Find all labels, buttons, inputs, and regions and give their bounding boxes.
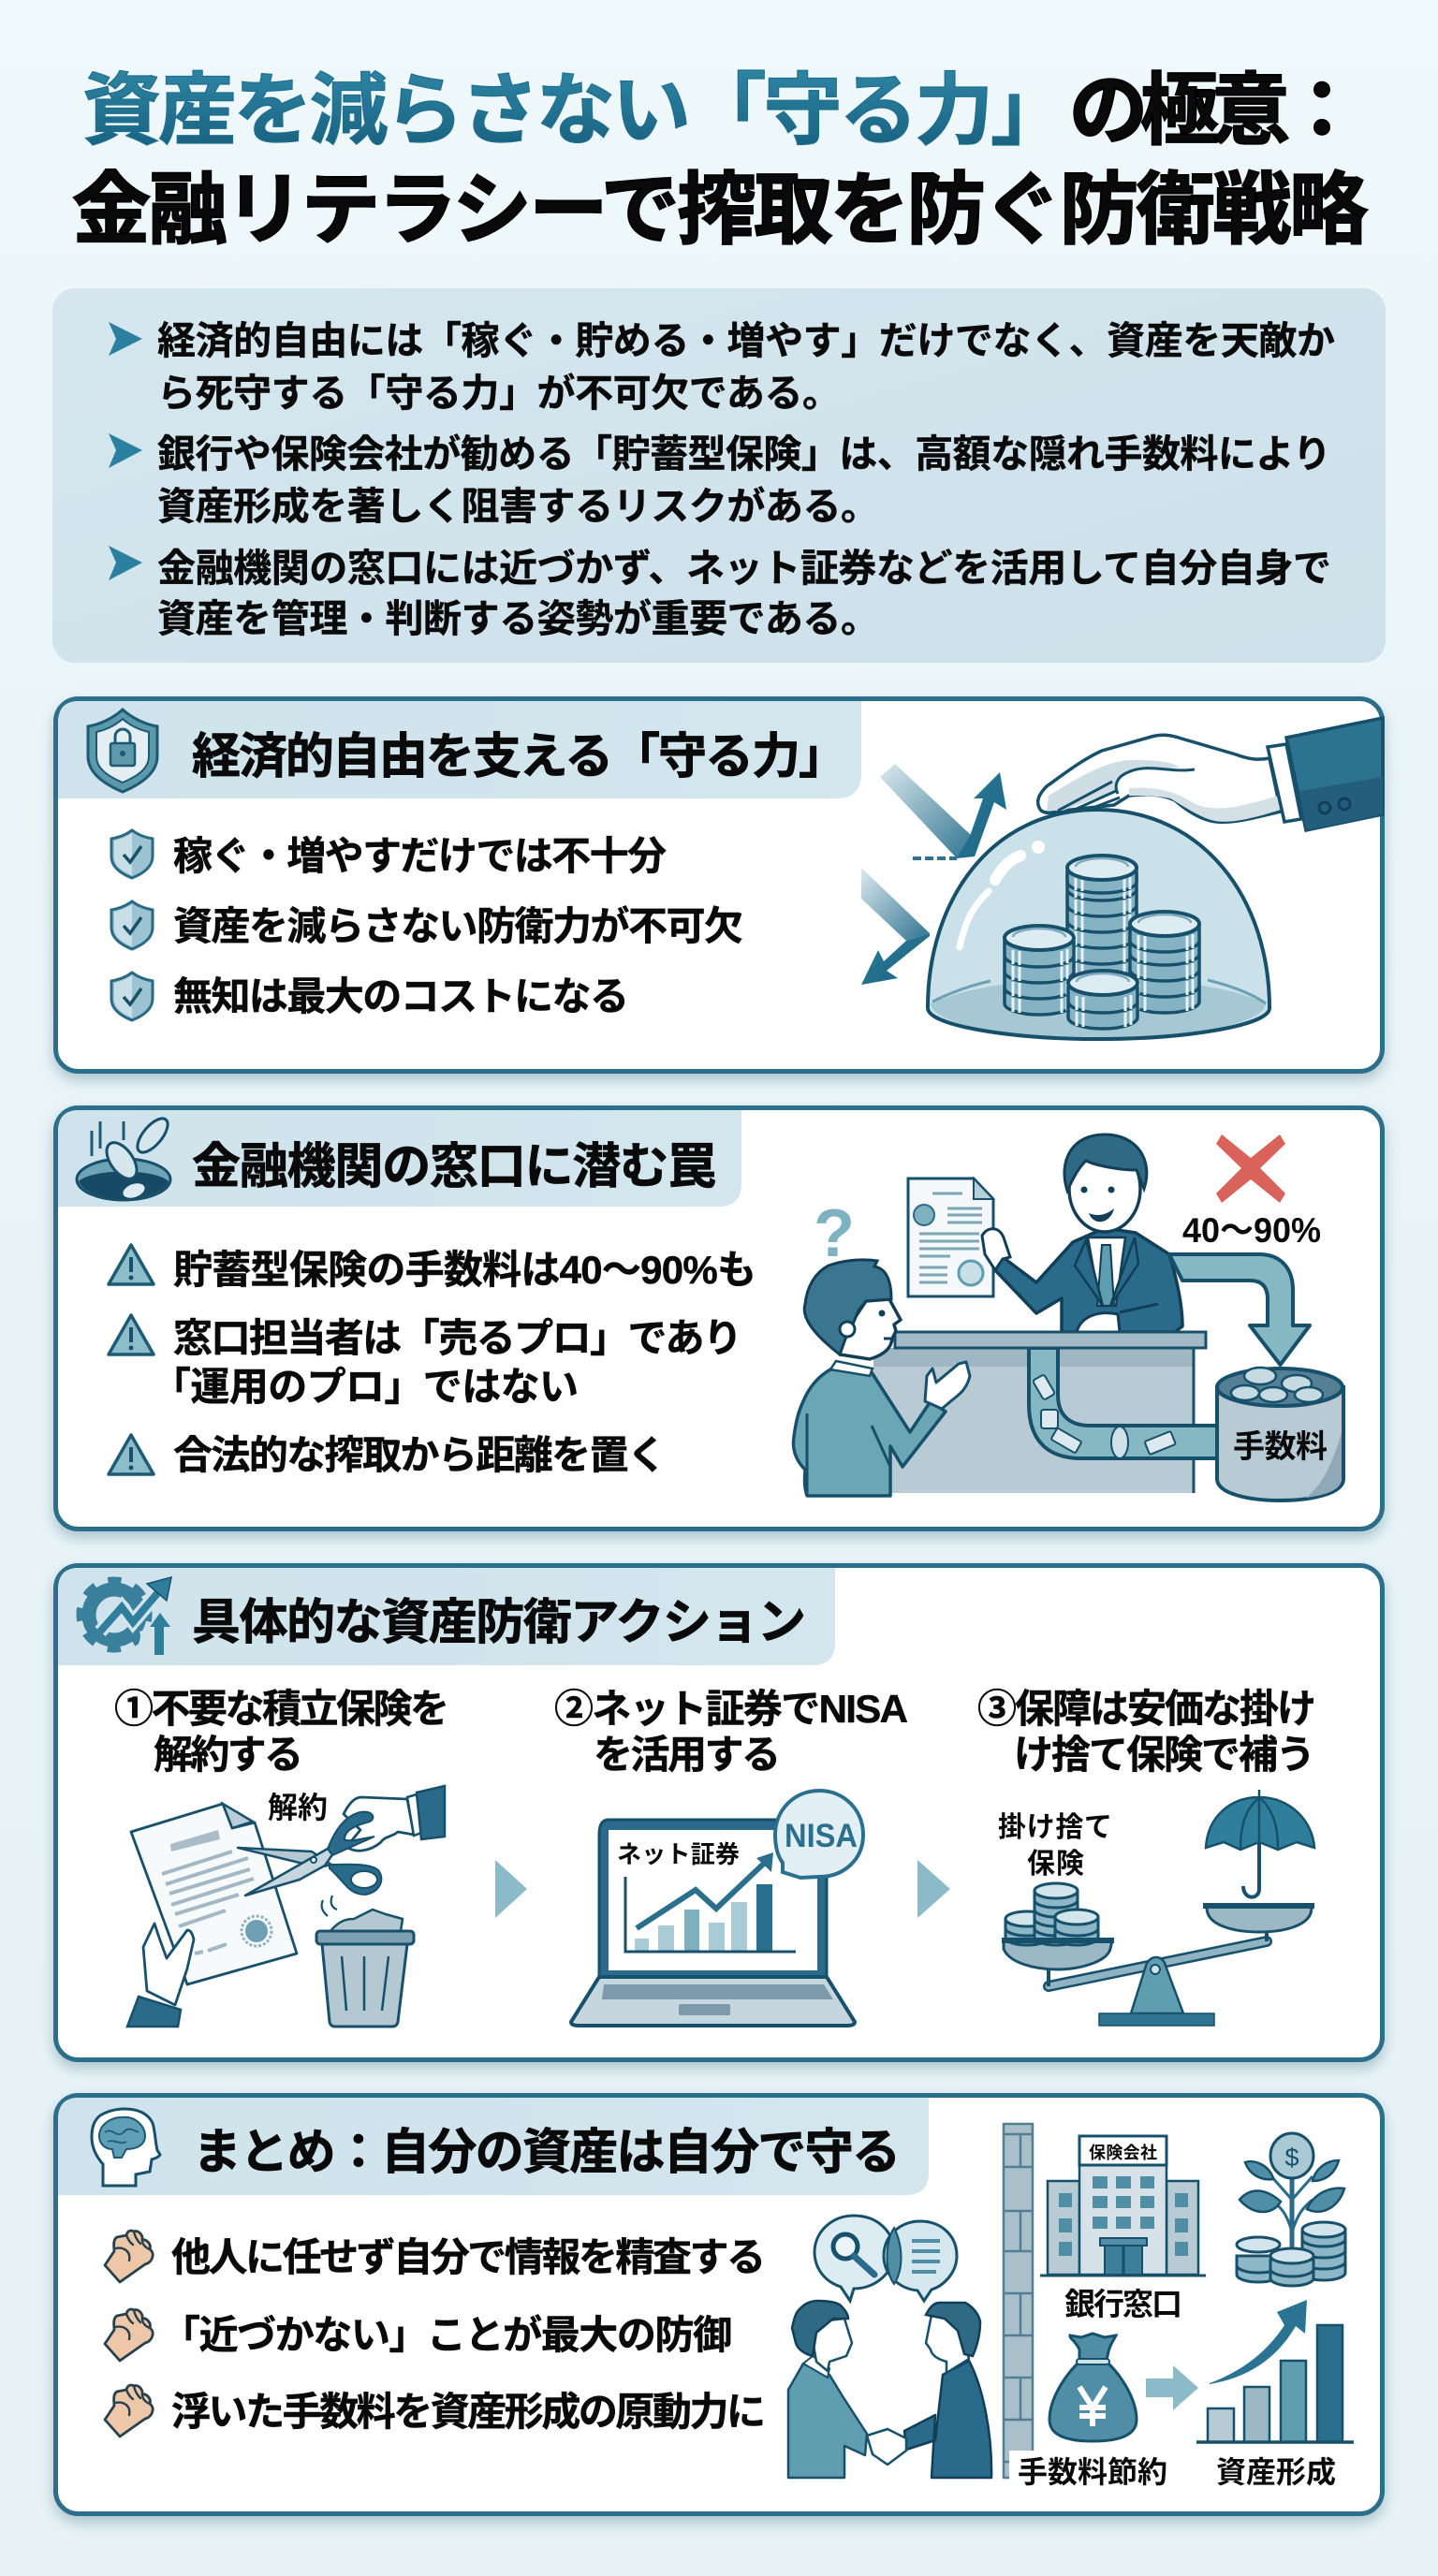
title: の極意：	[1069, 66, 1361, 154]
scissors	[238, 1848, 331, 1866]
panel header band	[58, 1110, 741, 1207]
illustration: yen money bag	[1049, 2334, 1137, 2441]
summary point 2	[109, 432, 1331, 528]
label 解約: 解約	[268, 1791, 328, 1824]
counter	[873, 1348, 1194, 1493]
staff member holding contract	[995, 1134, 1182, 1332]
illustration: laptop with growth chart and NISA bubble	[571, 1791, 863, 2026]
contract document	[908, 1178, 993, 1296]
step 3 heading: ③保障は安価な掛け	[977, 1687, 1316, 1731]
checklist item 3: 無知は最大のコストになる	[173, 974, 629, 1018]
summary point 1: 経済的自由には「稼ぐ・貯める・増やす」だけでなく、資産を天敵か	[157, 319, 1335, 362]
summary point 1	[109, 319, 1335, 415]
title: 金融リテラシーで搾取を防ぐ防衛戦略	[72, 166, 1368, 254]
warning item 2	[109, 1315, 742, 1409]
step 3	[977, 1687, 1316, 2026]
speech bubble: search	[814, 2216, 894, 2301]
step 2 heading	[554, 1687, 908, 1777]
illustration: balance with coins and umbrella	[998, 1790, 1314, 2026]
step 2	[554, 1687, 908, 2026]
arrow: savings to growth	[1146, 2365, 1198, 2410]
step 3 heading: け捨て保険で補う	[1014, 1733, 1315, 1777]
contract sheet	[131, 1804, 297, 1984]
summary point 2: 銀行や保険会社が勧める「貯蓄型保険」は、高額な隠れ手数料により	[157, 432, 1331, 476]
fee pipe under the counter	[1029, 1348, 1217, 1458]
fee flow arrow	[1169, 1254, 1310, 1365]
warning item 3: 合法的な搾取から距離を置く	[173, 1433, 667, 1477]
step 2 heading: ②ネット証券でNISA	[554, 1687, 908, 1731]
panel: 具体的な資産防衛アクション	[56, 1565, 1382, 2059]
label 銀行窓口: 銀行窓口	[1064, 2287, 1182, 2321]
bucket label: 手数料	[1233, 1429, 1328, 1465]
label 40〜90%: 40〜90%	[1182, 1211, 1321, 1250]
illustration: laptop with growth chart and NISA bubble: ネット証券	[617, 1840, 740, 1868]
panel heading: 具体的な資産防衛アクション	[192, 1596, 806, 1650]
step 1	[114, 1687, 449, 2027]
step 2 heading: を活用する	[594, 1733, 781, 1777]
illustration: balance with coins and umbrella: 掛け捨て	[998, 1812, 1112, 1843]
panel: 金融機関の窓口に潜む罠	[56, 1108, 1382, 1530]
icon: shield with padlock	[88, 710, 157, 792]
panel: まとめ	[56, 2095, 1382, 2514]
counter top	[895, 1332, 1206, 1348]
handshake	[867, 2429, 906, 2465]
illustration: bank counter, salesperson and fee pipe	[794, 1134, 1343, 1500]
coin stacks	[1005, 856, 1199, 1029]
speech bubble: document	[884, 2221, 957, 2301]
icon: coin falling into hole	[77, 1114, 173, 1201]
person left	[788, 2301, 867, 2478]
step 1 heading: ①不要な積立保険を	[114, 1687, 449, 1731]
left hand and sleeve	[143, 1924, 194, 2005]
arrow: step 1 to 2	[495, 1860, 527, 1918]
panel: 経済的自由を支える「守る力」	[56, 698, 1383, 1071]
illustration: money tree with coins: $	[1284, 2144, 1299, 2172]
summary point 3: 資産を管理・判断する姿勢が重要である。	[157, 597, 879, 640]
summary point 2: 資産形成を著しく阻害するリスクがある。	[157, 485, 879, 528]
warning item 2: 窓口担当者は「売るプロ」であり	[173, 1316, 742, 1360]
icon: gear with rising arrows	[81, 1577, 171, 1655]
hand and sleeve	[1038, 735, 1281, 822]
illustration: two people shaking hands, speech bubbles	[788, 2216, 991, 2478]
fee bucket	[1217, 1368, 1343, 1500]
illustration: money tree with coins	[1237, 2133, 1345, 2286]
person right	[904, 2303, 991, 2478]
summary point 3: 金融機関の窓口には近づかず、ネット証券などを活用して自分自身で	[157, 547, 1331, 590]
panel heading: 金融機関の窓口に潜む罠	[192, 1140, 716, 1194]
checklist item 1: 稼ぐ・増やすだけでは不十分	[173, 834, 667, 878]
glass dome	[928, 810, 1269, 1039]
illustration: coins under glass dome protected by a hand	[861, 718, 1383, 1039]
checklist item 2: 資産を減らさない防衛力が不可欠	[173, 904, 743, 948]
arrow: step 2 to 3	[917, 1860, 950, 1918]
illustration: contract being cut and discarded	[127, 1786, 445, 2027]
illustration: balance with coins and umbrella: 保険	[1027, 1849, 1084, 1880]
label 資産形成: 資産形成	[1216, 2455, 1336, 2489]
bar chart: asset growth	[1196, 2300, 1354, 2442]
takeaway 3: 浮いた手数料を資産形成の原動力に	[171, 2390, 766, 2434]
panel heading: まとめ：自分の資産は自分で守る	[193, 2126, 901, 2180]
takeaway 2: 「近づかない」ことが最大の防御	[161, 2313, 732, 2357]
panel header band	[58, 1568, 835, 1665]
panel header band	[58, 701, 861, 798]
label 手数料節約: 手数料節約	[1018, 2455, 1167, 2489]
step 1 heading	[114, 1687, 449, 1777]
step 1 heading: 解約する	[154, 1733, 303, 1777]
illustration: insurance company building	[1040, 2136, 1206, 2276]
attack arrows deflected	[861, 764, 1006, 985]
right hand	[344, 1797, 414, 1851]
illustration: laptop with growth chart and NISA bubble: NISA	[785, 1818, 858, 1854]
summary point 1: ら死守する「守る力」が不可欠である。	[157, 372, 841, 415]
title: 資産を減らさない「守る力」	[82, 66, 1069, 154]
brick wall	[1004, 2124, 1033, 2478]
warning item 2: 「運用のプロ」ではない	[152, 1365, 579, 1409]
warning item 1: 貯蓄型保険の手数料は40〜90%も	[173, 1248, 756, 1292]
panel header band	[58, 2098, 929, 2195]
red cross	[1216, 1134, 1285, 1203]
illustration: insurance company building: 保険会社	[1089, 2144, 1157, 2162]
summary point 3	[109, 546, 1331, 640]
panel: summary	[52, 288, 1386, 663]
takeaway 1: 他人に任せず自分で情報を精査する	[171, 2235, 766, 2279]
question mark: ?	[814, 1196, 855, 1271]
title	[72, 66, 1368, 254]
step 3 heading	[977, 1687, 1316, 1777]
customer	[794, 1260, 970, 1496]
trash can	[322, 1895, 337, 1916]
panel heading: 経済的自由を支える「守る力」	[192, 730, 847, 784]
icon: head with brain	[92, 2109, 160, 2186]
